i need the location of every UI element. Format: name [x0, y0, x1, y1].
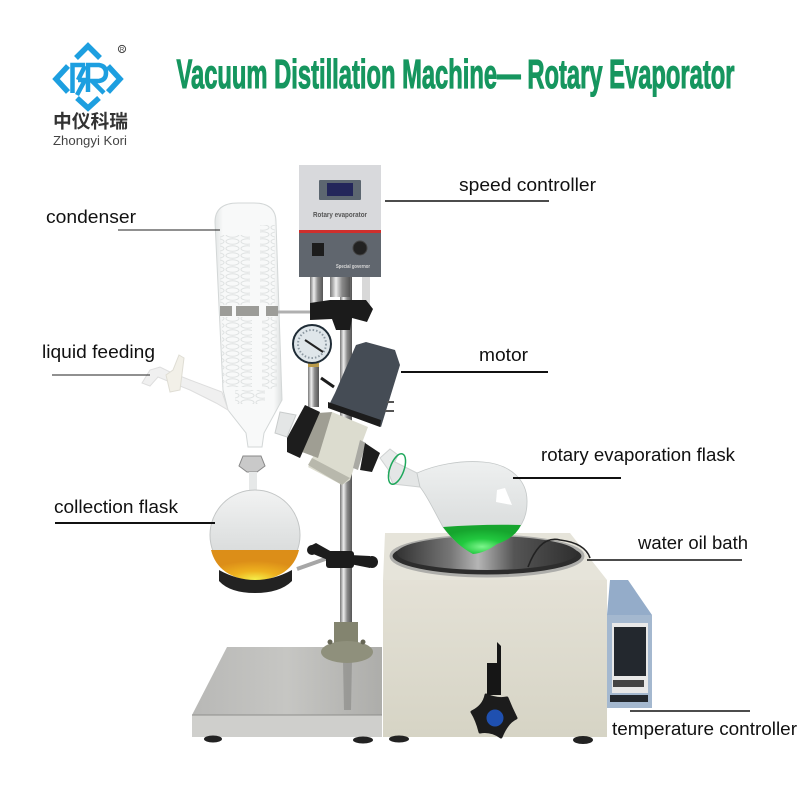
collection flask: lower clamp: [307, 543, 378, 568]
rotary evaporation flask: [380, 449, 527, 554]
label: collection flask: collection flask: [54, 496, 179, 517]
label: liquid feeding: liquid feeding: [42, 341, 155, 362]
speed controller: knob: [353, 241, 367, 255]
flask body: [417, 462, 527, 553]
liquid feeding glass tube: [142, 355, 228, 410]
condenser: coils: [220, 225, 277, 404]
flask neck: [380, 449, 398, 472]
support pole and collar: [321, 277, 373, 663]
speed controller: small label: Special governor: [336, 264, 370, 270]
speed controller: [299, 165, 381, 277]
glass connector: [275, 412, 296, 437]
logo: registered mark: R: [120, 48, 125, 54]
label: rotary evaporation flask: rotary evaporation flask: [541, 444, 736, 465]
label: temperature controller: temperature controller: [612, 718, 797, 739]
logo: [53, 45, 128, 148]
speed controller: label: Rotary evaporator: [313, 212, 367, 219]
logo: blue diamond mark: [56, 46, 120, 108]
label: condenser: condenser: [46, 206, 136, 227]
silver collar: [353, 440, 366, 470]
output cap: [360, 443, 380, 472]
water oil bath: [383, 533, 607, 744]
gauge cable: [321, 378, 334, 387]
beige head: [308, 412, 368, 485]
label: motor: motor: [479, 344, 528, 365]
logo: English name: Zhongyi Kori: [53, 134, 127, 148]
green clip: [385, 452, 409, 486]
logo: Chinese name: 中仪科瑞: [53, 111, 128, 132]
condenser: metal clamp band: [220, 306, 313, 316]
speed controller: display: [319, 180, 361, 200]
label: liquid feeding: [42, 341, 155, 375]
label: water oil bath: water oil bath: [637, 532, 748, 553]
drain knob: [472, 695, 516, 737]
temperature controller: [607, 580, 652, 708]
condenser: [215, 203, 313, 447]
black ring: [287, 405, 320, 458]
speed controller: switch: [312, 243, 324, 256]
collection flask: clip joint: [239, 456, 265, 472]
green liquid: [443, 525, 521, 554]
collection flask: [210, 456, 378, 593]
collection flask: black holder: [219, 570, 292, 593]
flask highlights: [496, 488, 512, 505]
upper clamp and fittings: [310, 277, 373, 330]
base plate: [192, 647, 382, 744]
rotary joint: [275, 405, 380, 485]
motor: [328, 342, 400, 427]
gauge: [293, 325, 331, 407]
collection flask: holder arm: [297, 558, 328, 569]
label: speed controller: speed controller: [459, 174, 596, 195]
drain lever: [487, 642, 501, 695]
